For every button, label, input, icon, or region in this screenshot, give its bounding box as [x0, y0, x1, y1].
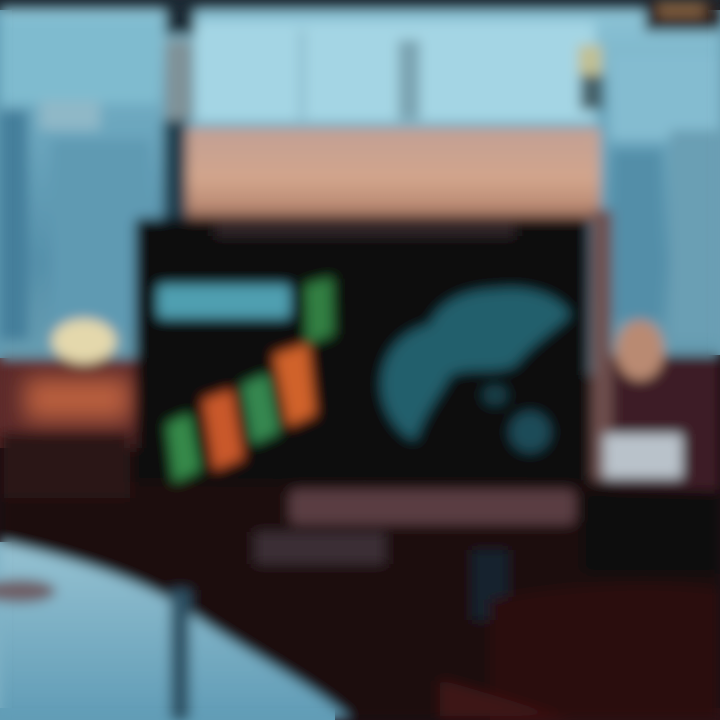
- chart: rising bars: [167, 278, 333, 482]
- peach wall band: [187, 128, 612, 480]
- top dark ceiling band: [0, 0, 720, 35]
- lamp and orange counter left: [0, 319, 140, 448]
- floor: light blue lower left: [0, 542, 350, 720]
- desk surface: [0, 432, 720, 720]
- monitor: [135, 218, 590, 483]
- right side figure and paper: [604, 320, 720, 490]
- dark chair right: [440, 492, 720, 720]
- map: [382, 289, 570, 452]
- window panes and mullions: [0, 18, 720, 340]
- chart: teal header: [158, 285, 290, 318]
